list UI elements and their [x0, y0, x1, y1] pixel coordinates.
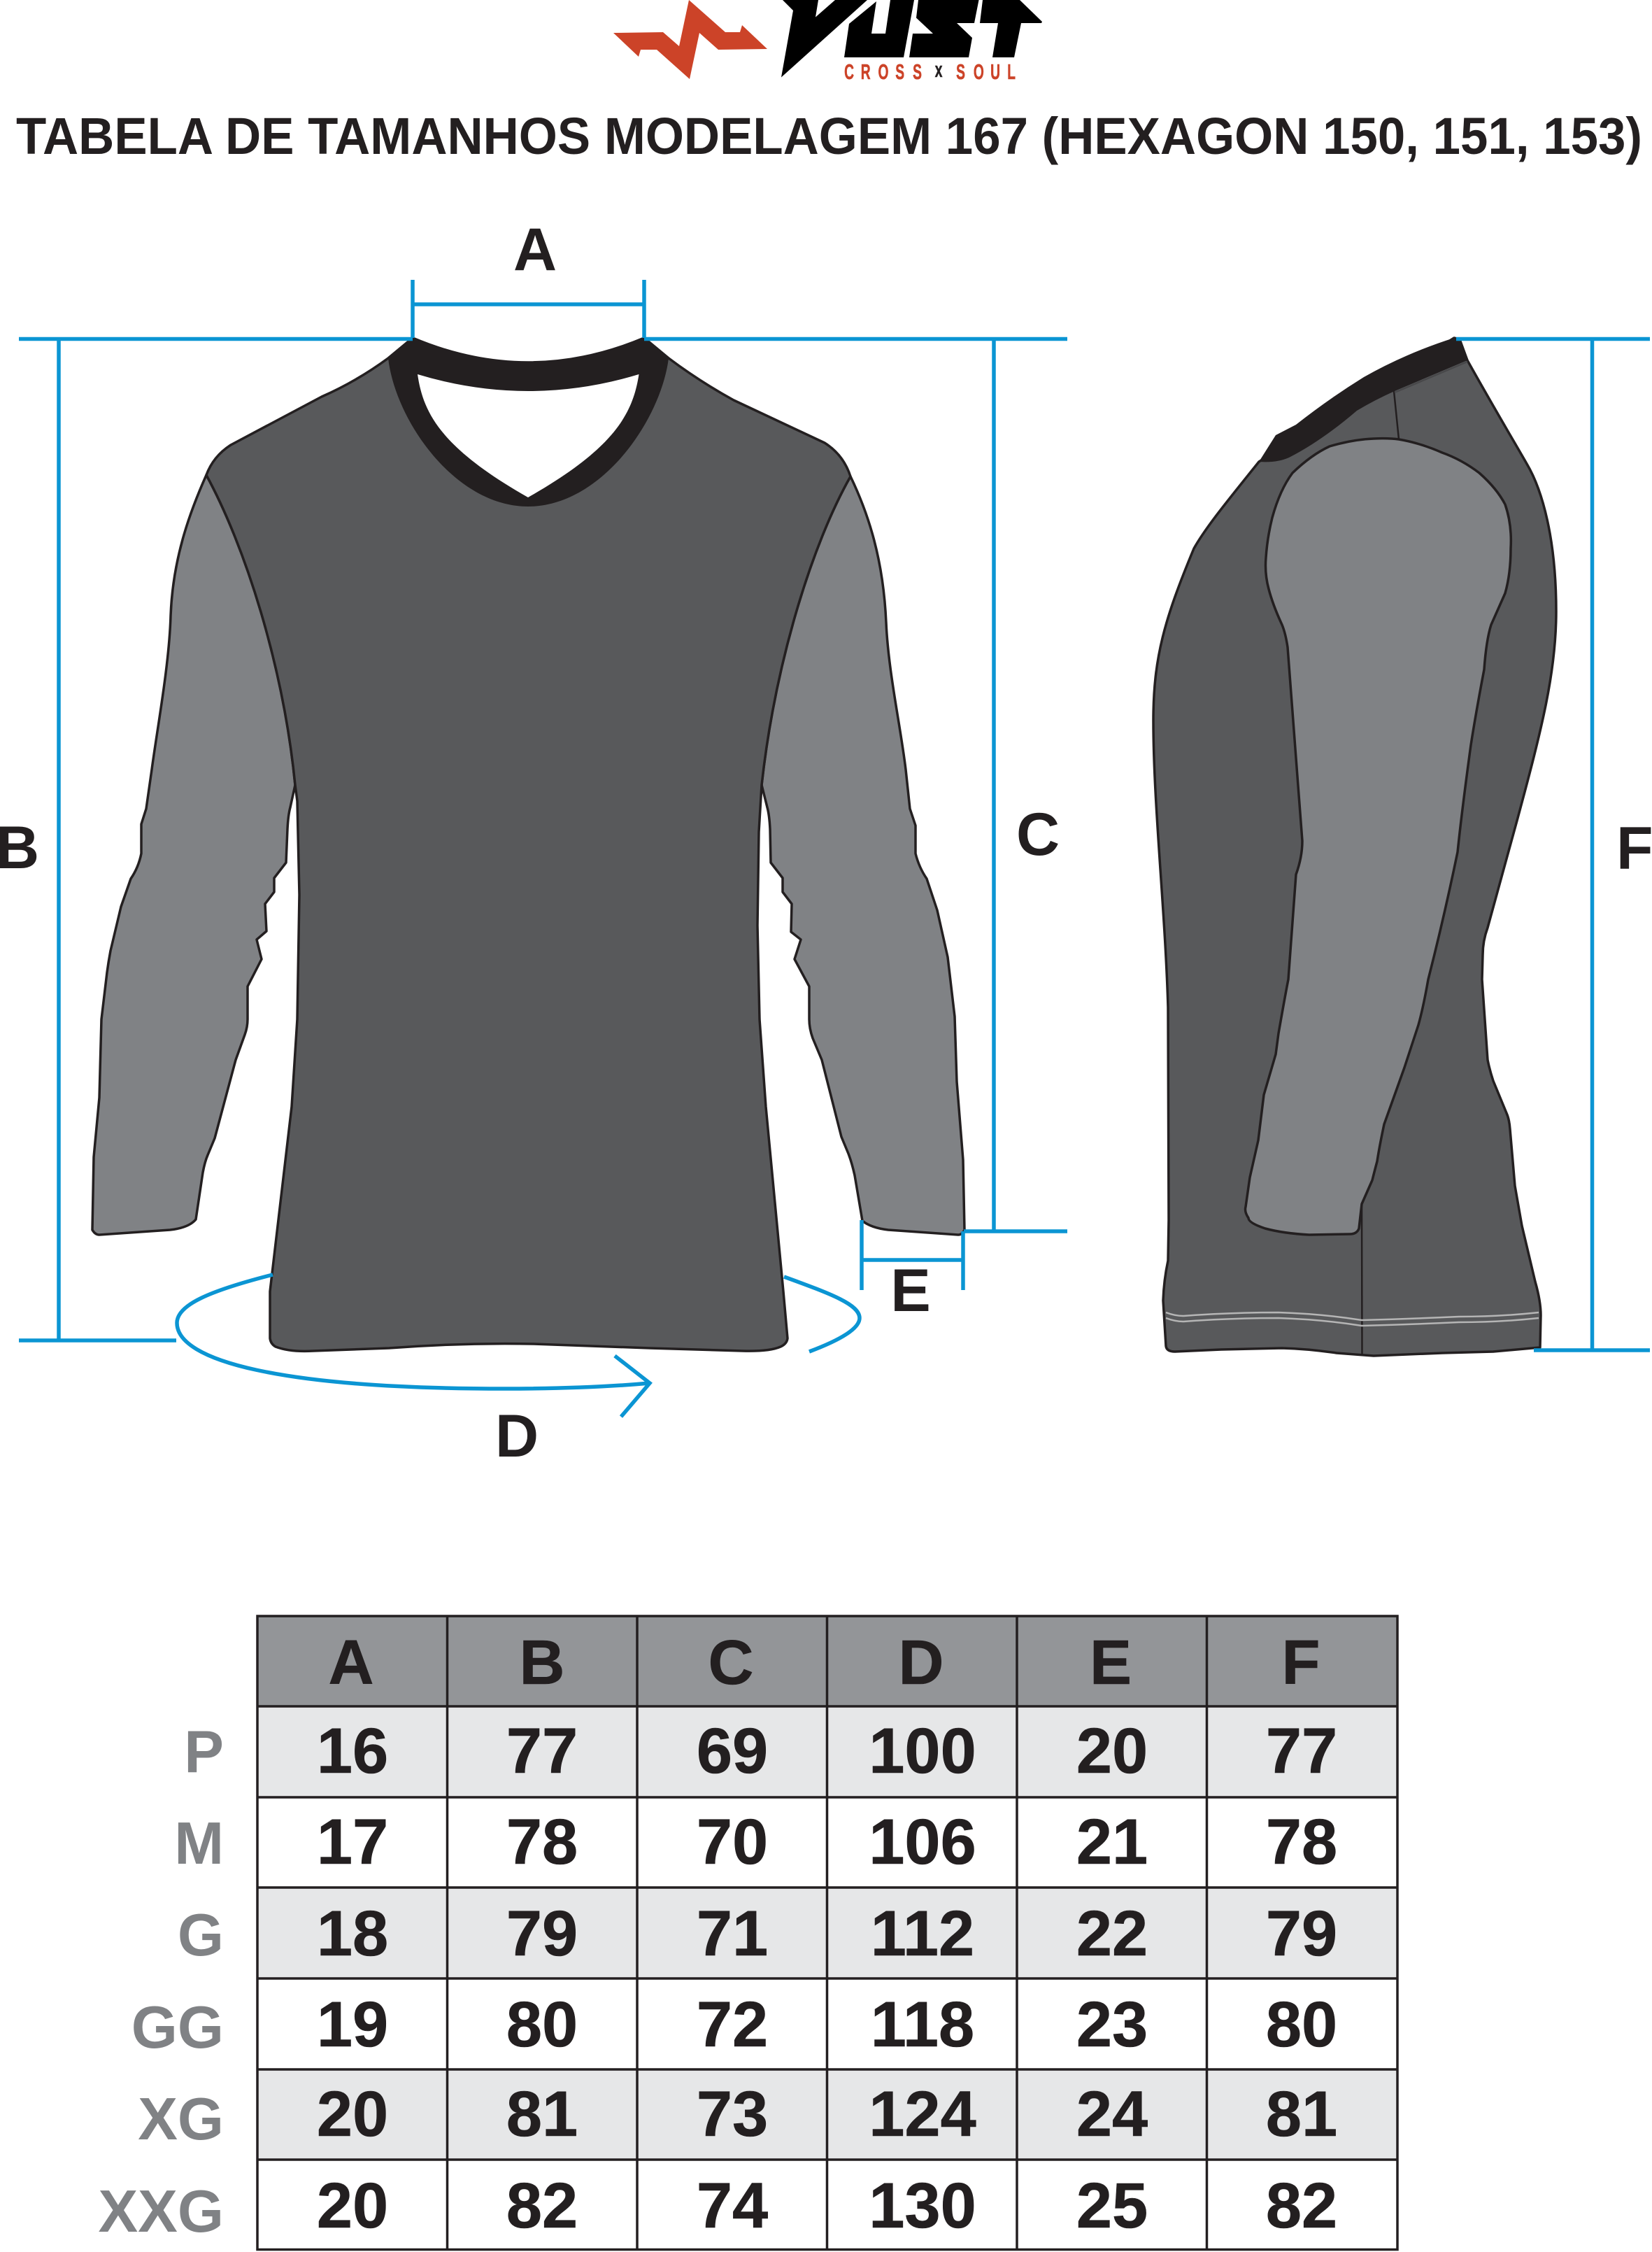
header row fill	[257, 1616, 1397, 1706]
table values	[317, 1628, 1337, 2242]
row GG: 80	[506, 1989, 578, 2060]
shirt body	[206, 338, 850, 1351]
header letters: F	[1282, 1628, 1320, 1698]
row M: 78	[1266, 1806, 1337, 1878]
measure C	[644, 339, 1067, 1231]
side view shirt	[1153, 338, 1556, 1356]
row XG: 24	[1076, 2079, 1148, 2150]
measure D ellipse arrow	[177, 1275, 860, 1417]
right sleeve	[762, 476, 964, 1235]
row XG: 124	[869, 2079, 976, 2150]
logo tagline: SOUL	[956, 61, 1016, 84]
row XXG: 20	[317, 2170, 388, 2242]
row XG: 73	[697, 2079, 768, 2150]
row P: 100	[869, 1715, 976, 1787]
letter D: D	[495, 1403, 539, 1470]
sleeve	[1245, 439, 1511, 1235]
header letters: E	[1090, 1628, 1132, 1698]
row GG: 23	[1076, 1989, 1148, 2060]
header letters	[329, 1628, 1320, 1698]
neck opening	[418, 374, 639, 497]
logo wordmark: black letter shapes	[781, 0, 1042, 77]
row XXG: 82	[506, 2170, 578, 2242]
row G	[317, 1898, 1337, 1969]
size labels: P	[184, 1719, 224, 1785]
row G: 22	[1076, 1898, 1148, 1969]
letter F: F	[1616, 815, 1652, 882]
measure B	[19, 339, 413, 1340]
measure F	[1456, 339, 1650, 1350]
header letters: D	[898, 1628, 944, 1698]
centre side seam	[1361, 1204, 1363, 1356]
size labels: XXG	[98, 2179, 224, 2245]
row G: 71	[697, 1898, 768, 1969]
row shading	[257, 1706, 1397, 2160]
size labels: M	[174, 1811, 224, 1877]
measurement lines	[19, 280, 1650, 1417]
logo tagline: CROSS	[844, 61, 922, 84]
front view shirt	[92, 338, 964, 1351]
header letters: B	[519, 1628, 565, 1698]
logo tagline	[844, 59, 1016, 84]
row XXG: 82	[1266, 2170, 1337, 2242]
row GG	[317, 1989, 1337, 2060]
size labels: GG	[131, 1995, 224, 2061]
row G: 18	[317, 1898, 388, 1969]
side collar	[1259, 338, 1467, 462]
shoulder seams	[1394, 391, 1399, 439]
row P: 16	[317, 1715, 388, 1787]
hem stitching	[1166, 1312, 1539, 1326]
row GG: 19	[317, 1989, 388, 2060]
collar	[388, 338, 669, 507]
row P: 77	[1266, 1715, 1337, 1787]
row M	[317, 1806, 1337, 1878]
letter E: E	[890, 1257, 931, 1324]
size labels	[98, 1719, 224, 2245]
row GG: 72	[697, 1989, 768, 2060]
icon: red lightning bolt	[613, 0, 767, 79]
header letters: A	[329, 1628, 373, 1698]
letter A: A	[513, 216, 557, 283]
side body	[1153, 338, 1556, 1356]
row P: 20	[1076, 1715, 1148, 1787]
row M: 17	[317, 1806, 388, 1878]
left sleeve	[92, 475, 295, 1235]
size labels: G	[178, 1902, 224, 1969]
row XXG: 74	[697, 2170, 768, 2242]
row XG: 81	[1266, 2079, 1337, 2150]
row M: 70	[697, 1806, 768, 1878]
row P: 69	[697, 1715, 768, 1787]
logo tagline: x	[935, 59, 943, 82]
row M: 106	[869, 1806, 976, 1878]
size labels: XG	[138, 2086, 224, 2153]
letter C: C	[1016, 801, 1060, 868]
row M: 21	[1076, 1806, 1148, 1878]
row XXG	[317, 2170, 1337, 2242]
size table	[98, 1616, 1397, 2250]
measure A	[413, 280, 644, 338]
logo: Vust Cross x Soul	[613, 0, 1042, 84]
measurement letters	[0, 216, 1652, 1470]
row G: 79	[1266, 1898, 1337, 1969]
row XXG: 130	[869, 2170, 976, 2242]
row M: 78	[506, 1806, 578, 1878]
row GG: 118	[871, 1989, 974, 2060]
row P: 77	[506, 1715, 578, 1787]
row XG	[317, 2079, 1337, 2150]
row XXG: 25	[1076, 2170, 1148, 2242]
measure E	[862, 1220, 963, 1290]
header letters: C	[708, 1628, 754, 1698]
row P	[317, 1715, 1337, 1787]
row GG: 80	[1266, 1989, 1337, 2060]
row G: 112	[871, 1898, 974, 1969]
row XG: 20	[317, 2079, 388, 2150]
row XG: 81	[506, 2079, 578, 2150]
row G: 79	[506, 1898, 578, 1969]
